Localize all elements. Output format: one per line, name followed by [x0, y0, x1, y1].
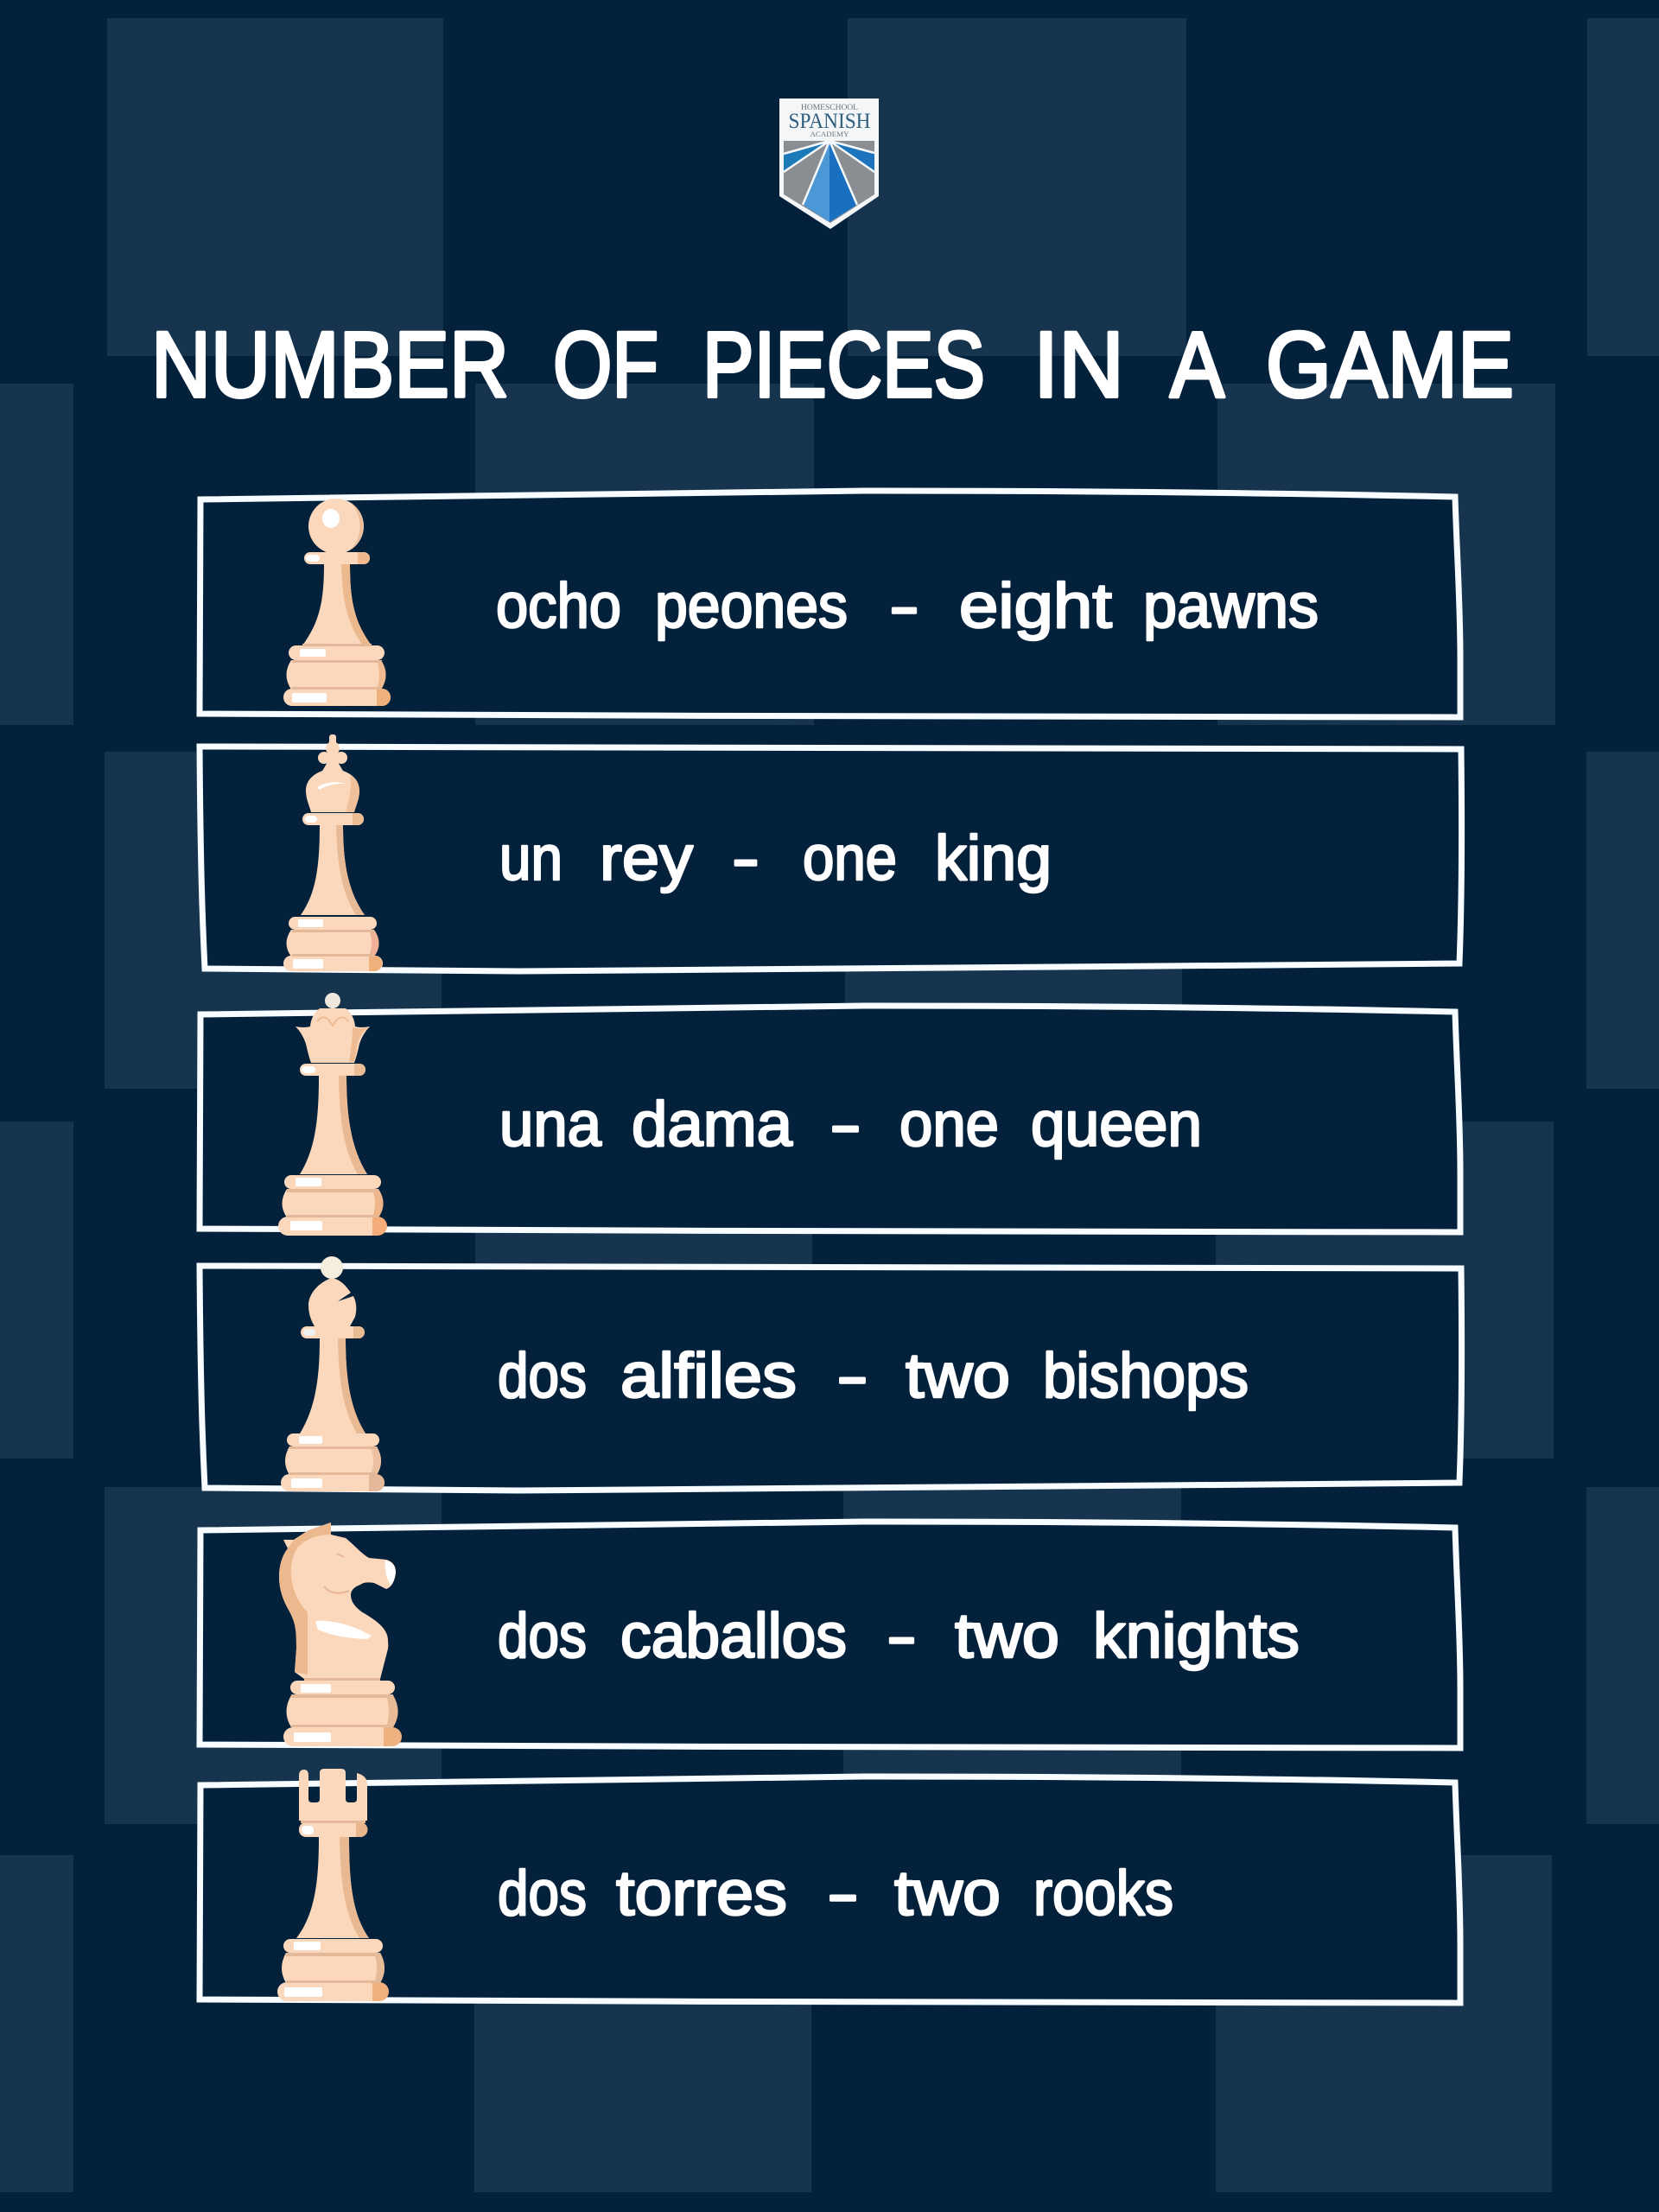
text: bishops: two — [906, 1341, 1010, 1411]
text: rooks: dos — [498, 1859, 587, 1929]
text: bishops: alfiles — [620, 1341, 797, 1411]
panel: bishops — [200, 1256, 1462, 1491]
icon: king — [283, 734, 383, 971]
logo: Homeschool Spanish Academy shield: HOMESCHOOL — [801, 103, 858, 111]
text: king: rey — [600, 823, 694, 893]
text: queen: una — [499, 1090, 601, 1160]
text: bishops: - — [836, 1341, 868, 1411]
panel: queen — [200, 993, 1460, 1236]
text: rooks: torres — [616, 1859, 787, 1929]
text: queen: queen — [1031, 1090, 1202, 1160]
text: king — [499, 823, 1052, 893]
icon: knight — [279, 1522, 402, 1746]
logo: Homeschool Spanish Academy shield: ACADEMY — [810, 130, 849, 138]
text: pawns: peones — [655, 571, 848, 641]
panel: rooks — [200, 1769, 1460, 2003]
text: pawns — [496, 571, 1319, 641]
text: queen: dama — [632, 1090, 792, 1160]
text: bishops: dos — [498, 1341, 587, 1411]
logo: Homeschool Spanish Academy shield: SPANISH — [788, 110, 871, 133]
text: knights — [498, 1601, 1300, 1671]
text: pawns: - — [889, 571, 919, 641]
panel: pawns — [200, 491, 1460, 717]
text: king: - — [732, 823, 760, 893]
icon: bishop — [281, 1256, 385, 1491]
icon: queen — [278, 993, 387, 1236]
text: rooks: - — [827, 1859, 859, 1929]
text: knights: two — [955, 1601, 1059, 1671]
logo: Homeschool Spanish Academy shield — [779, 99, 879, 229]
text: bishops — [498, 1341, 1249, 1411]
text: rooks: two — [894, 1859, 1001, 1929]
text: king: one — [803, 823, 897, 893]
title: A — [1170, 312, 1224, 416]
text: pawns: eight — [959, 571, 1112, 641]
title — [151, 312, 1514, 416]
text: knights: knights — [1093, 1601, 1300, 1671]
text: queen: one — [899, 1090, 999, 1160]
text: knights: caballos — [620, 1601, 847, 1671]
icon: rook — [277, 1769, 389, 2001]
text: king: un — [499, 823, 563, 893]
title: GAME — [1266, 312, 1514, 416]
text: bishops: bishops — [1043, 1341, 1249, 1411]
title: IN — [1033, 312, 1124, 416]
text: pawns: ocho — [496, 571, 621, 641]
text: knights: - — [887, 1601, 917, 1671]
text: pawns: pawns — [1143, 571, 1319, 641]
panel: knights — [200, 1522, 1460, 1748]
text: rooks: rooks — [1033, 1859, 1173, 1929]
title: PIECES — [702, 312, 985, 416]
title: NUMBER — [151, 312, 509, 416]
text: queen: - — [830, 1090, 861, 1160]
title: OF — [553, 312, 658, 416]
text: rooks — [498, 1859, 1173, 1929]
text: knights: dos — [498, 1601, 587, 1671]
text: queen — [499, 1090, 1202, 1160]
icon: pawn — [283, 499, 391, 706]
text: king: king — [935, 823, 1052, 893]
panel: king — [200, 734, 1462, 971]
